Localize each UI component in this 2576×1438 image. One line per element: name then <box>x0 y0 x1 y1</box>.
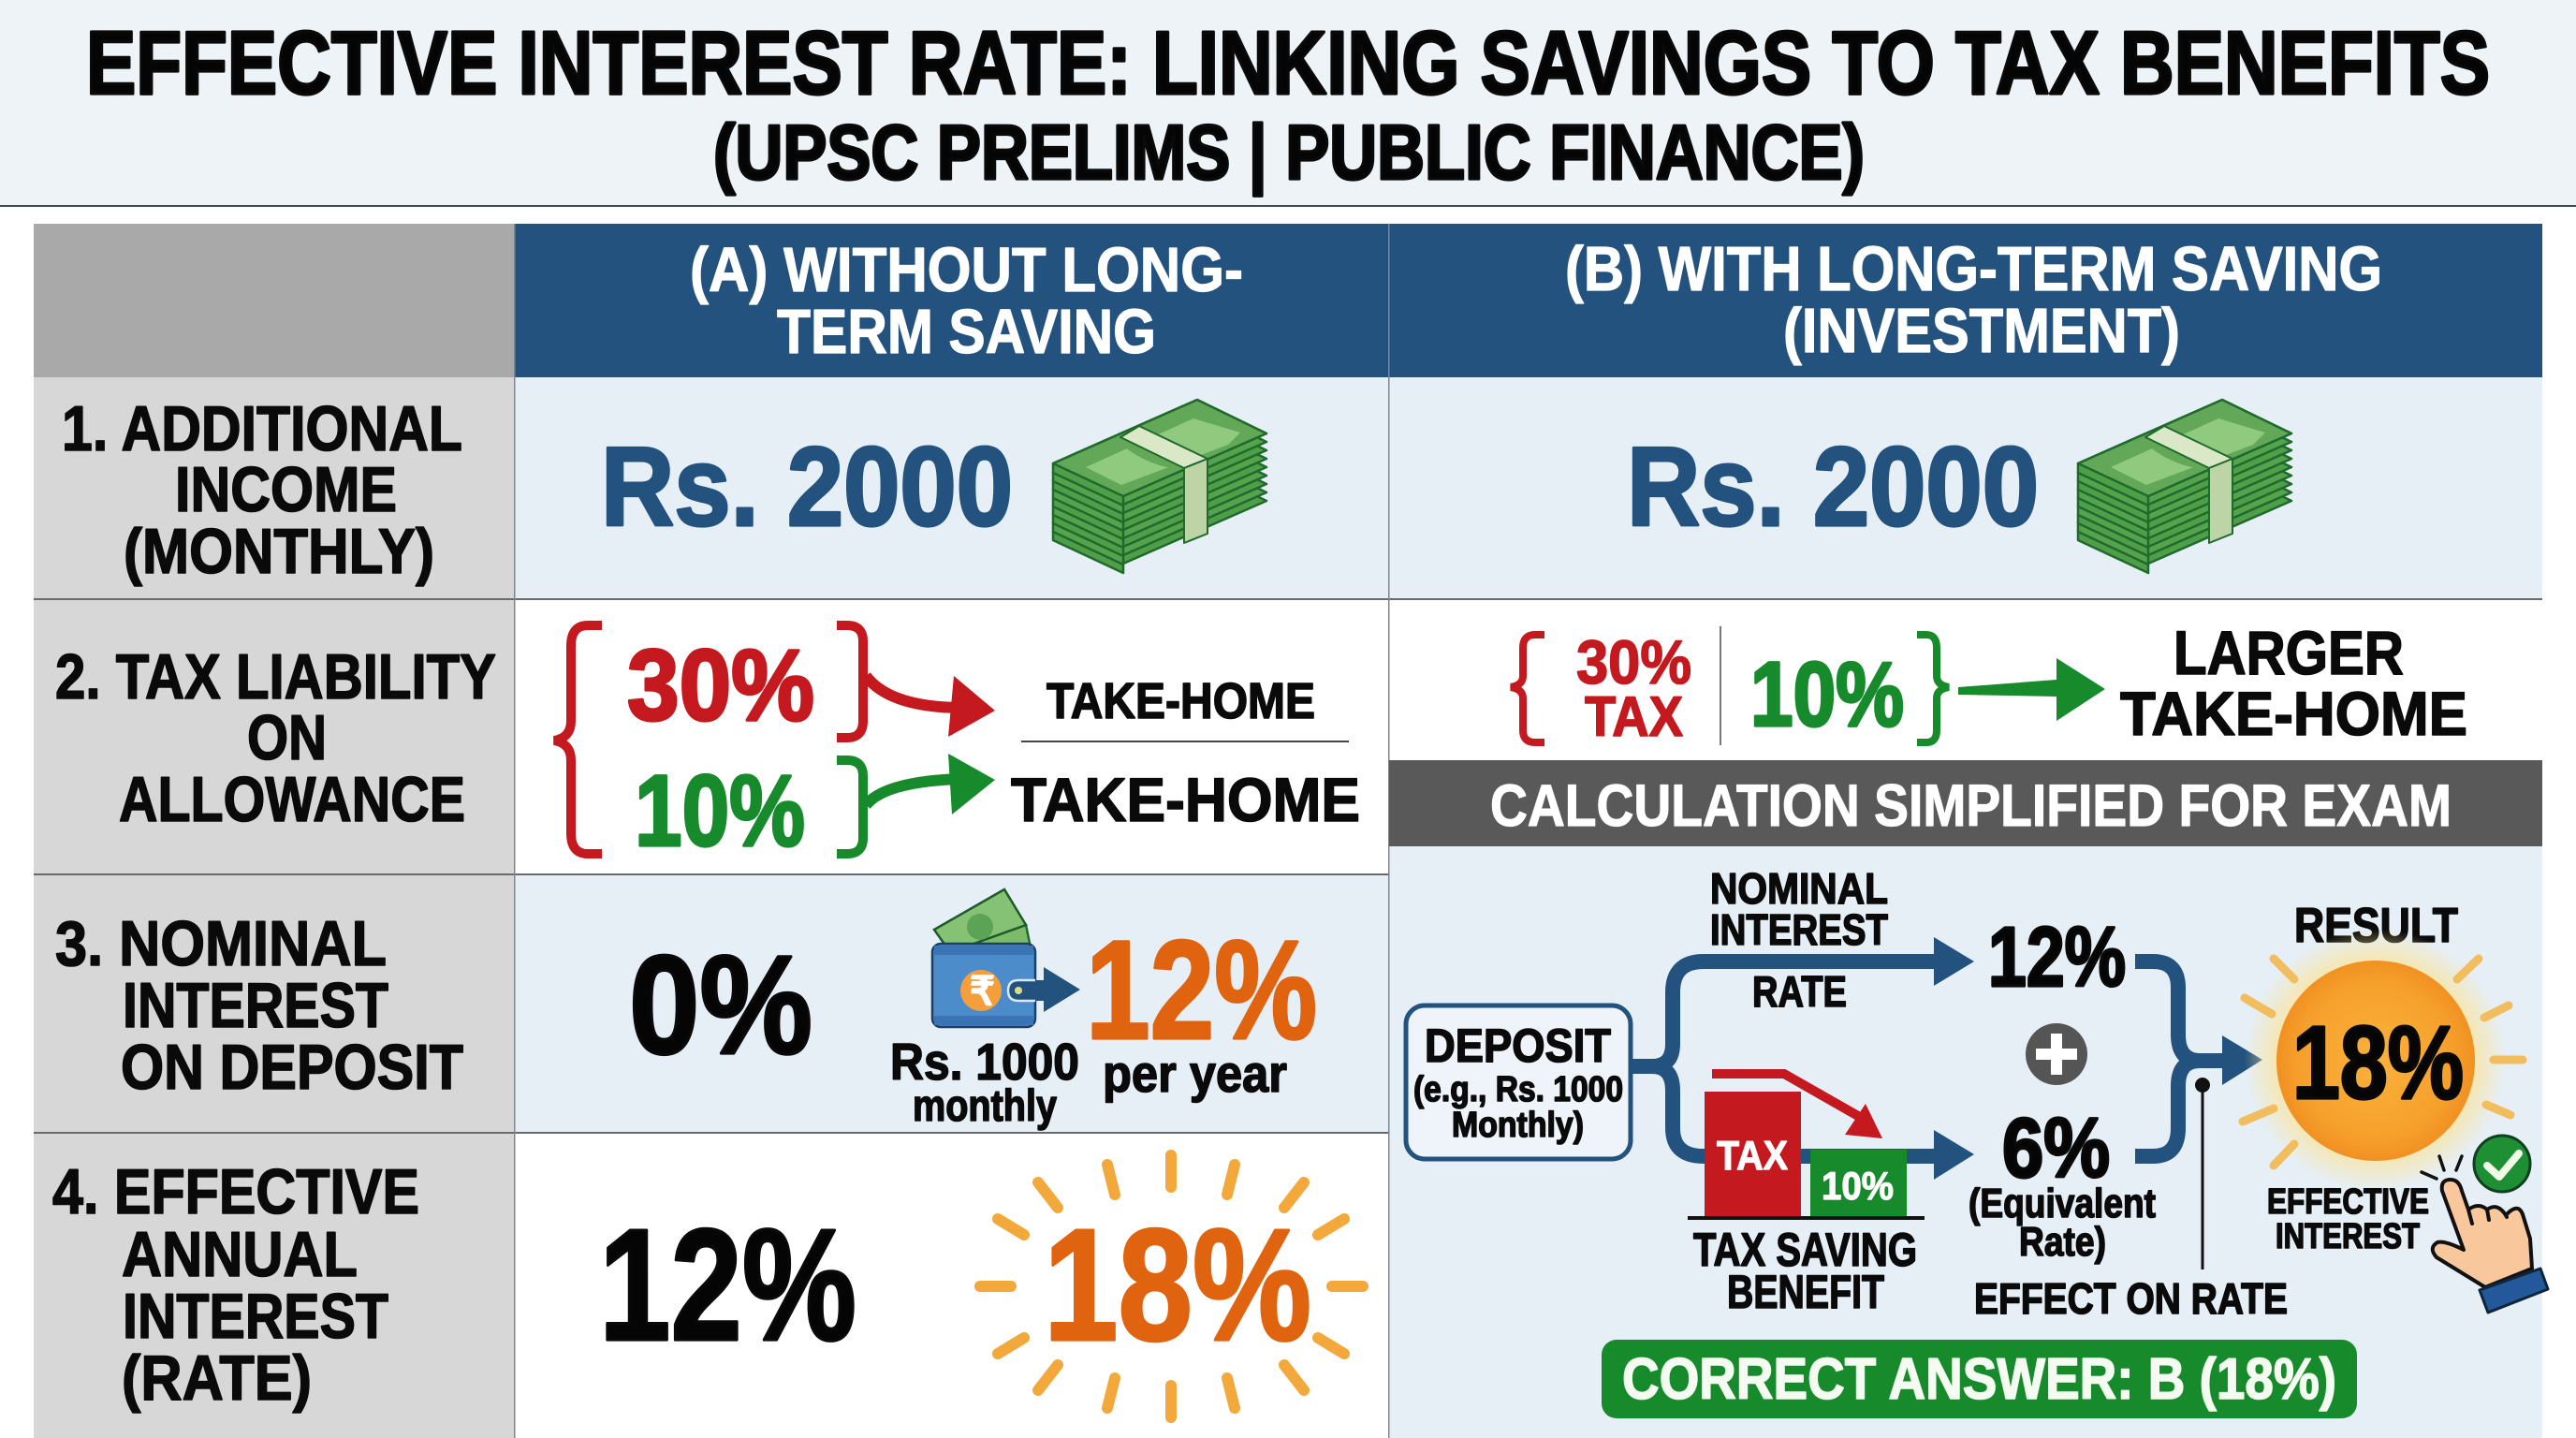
30 percent tax <box>1576 627 1691 748</box>
flow diagram <box>1406 864 2548 1418</box>
row label 3: nominal interest: 3. NOMINAL <box>55 908 387 979</box>
arrowheads <box>1934 937 2262 1180</box>
tax saving benefit label: BENEFIT <box>1727 1266 1884 1318</box>
row label 4: effective annual interest: 4. EFFECTIVE <box>52 1156 419 1227</box>
row label 1: additional income: 1. ADDITIONAL <box>62 393 462 464</box>
icon: check mark <box>2474 1136 2530 1192</box>
10 percent: 10% <box>1750 643 1904 745</box>
arrow: red <box>866 676 995 737</box>
30 percent: 30% <box>627 628 814 741</box>
10 percent: 10% <box>635 754 805 867</box>
6 percent equivalent rate: (Equivalent <box>1969 1181 2156 1226</box>
flow lines <box>1632 961 2228 1156</box>
amount B: Rs. 2000 <box>1627 424 2039 550</box>
nominal interest rate label: RATE <box>1752 967 1847 1016</box>
row label 2: tax liability <box>55 641 496 835</box>
tax saving bars: 10% <box>1822 1164 1894 1208</box>
row label 4: effective annual interest: INTEREST <box>123 1281 388 1352</box>
icon: wallet with cash: ₹ <box>970 969 995 1013</box>
icon: red brace <box>1511 635 1544 742</box>
12 percent per year: 12% <box>1086 911 1317 1068</box>
tax saving bars <box>1688 1074 1925 1220</box>
icon: result sun: 18% <box>2292 1005 2464 1121</box>
row label 1: additional income: INCOME <box>175 454 397 525</box>
caption: Rs. 1000 monthly: monthly <box>913 1080 1057 1130</box>
take-home large: TAKE-HOME <box>1011 765 1360 834</box>
6 percent equivalent rate: 6% <box>2002 1102 2110 1196</box>
12 percent: 12% <box>1988 911 2126 1005</box>
30 percent tax: 30% <box>1576 627 1691 697</box>
row label 4: effective annual interest: ANNUAL <box>122 1219 358 1290</box>
larger take-home <box>2120 618 2467 748</box>
rays around 18 percent <box>980 1155 1363 1417</box>
icon: wallet with cash <box>932 889 1080 1027</box>
deposit box <box>1406 1005 1631 1159</box>
row label 3: nominal interest: ON DEPOSIT <box>121 1032 463 1103</box>
6 percent equivalent rate: Rate) <box>2019 1219 2106 1265</box>
icon: money stack A <box>1053 400 1266 573</box>
row label 3: nominal interest: INTEREST <box>123 970 388 1041</box>
tax saving bars: TAX <box>1717 1133 1788 1179</box>
amount A: Rs. 2000 <box>601 424 1013 550</box>
caption: Rs. 1000 monthly <box>890 1033 1079 1130</box>
correct answer badge: CORRECT ANSWER: B (18%) <box>1622 1347 2336 1412</box>
effect on rate pointer <box>1974 1078 2288 1323</box>
effective interest label <box>2267 1182 2429 1256</box>
take-home small: TAKE-HOME <box>1046 673 1315 729</box>
12 percent per year <box>1086 911 1317 1103</box>
icon: plus <box>2026 1023 2087 1085</box>
row label 4: effective annual interest: (RATE) <box>122 1343 312 1414</box>
larger take-home: TAKE-HOME <box>2120 679 2467 748</box>
heading: column A: TERM SAVING <box>777 297 1156 367</box>
heading: column B: (B) WITH LONG-TERM SAVING <box>1565 234 2382 304</box>
banner: calculation simplified <box>1389 760 2542 846</box>
red bracket <box>837 625 863 738</box>
caption: Rs. 1000 monthly: Rs. 1000 <box>890 1033 1079 1091</box>
effective interest label: INTEREST <box>2276 1217 2420 1256</box>
deposit box: Monthly) <box>1452 1106 1584 1145</box>
12 percent per year: per year <box>1103 1044 1287 1103</box>
row label 3: nominal interest <box>55 908 463 1103</box>
row label 4: effective annual interest <box>52 1156 419 1414</box>
row label 1: additional income: (MONTHLY) <box>124 516 434 587</box>
icon: result sun <box>2243 929 2523 1191</box>
row label 1: additional income <box>62 393 462 587</box>
deposit box: (e.g., Rs. 1000 <box>1413 1070 1623 1109</box>
heading: column A <box>690 235 1243 367</box>
tax comparison A <box>554 625 1360 867</box>
6 percent equivalent rate <box>1969 1102 2156 1265</box>
nominal A value 0 percent: 0% <box>629 926 812 1083</box>
effect on rate pointer: EFFECT ON RATE <box>1974 1274 2288 1323</box>
heading: column B: (INVESTMENT) <box>1783 296 2180 366</box>
tax comparison B <box>1511 618 2467 748</box>
result label: RESULT <box>2294 899 2458 953</box>
arrow: green <box>1958 658 2105 721</box>
tax saving benefit label <box>1693 1224 1917 1318</box>
nominal interest rate label <box>1710 864 1888 1016</box>
effective A 18 percent: 18% <box>1044 1196 1311 1374</box>
title <box>86 13 2490 197</box>
row label 2: tax liability: 2. TAX LIABILITY <box>55 641 496 712</box>
effective interest label: EFFECTIVE <box>2267 1182 2429 1222</box>
30 percent tax: TAX <box>1585 685 1683 748</box>
row label 2: tax liability: ON <box>247 702 327 773</box>
icon: pointing hand <box>2422 1156 2548 1313</box>
icon: money stack B <box>2078 400 2291 573</box>
deposit box: DEPOSIT <box>1425 1020 1611 1072</box>
green bracket <box>837 760 863 854</box>
heading: column A: (A) WITHOUT LONG- <box>690 235 1243 305</box>
banner: calculation simplified: CALCULATION SIMPLIFIED FOR EXAM <box>1490 773 2452 839</box>
nominal interest rate label: INTEREST <box>1710 905 1888 954</box>
nominal interest rate label: NOMINAL <box>1710 864 1888 913</box>
tax saving benefit label: TAX SAVING <box>1693 1224 1917 1276</box>
icon: red left brace <box>554 625 602 854</box>
effective A 12 percent: 12% <box>599 1196 856 1374</box>
row label 2: tax liability: ALLOWANCE <box>119 764 465 835</box>
arrow: green <box>866 754 995 814</box>
heading: column B <box>1565 234 2382 366</box>
icon: green brace <box>1917 635 1949 742</box>
larger take-home: LARGER <box>2174 618 2404 687</box>
title: (UPSC PRELIMS | PUBLIC FINANCE) <box>713 109 1865 197</box>
